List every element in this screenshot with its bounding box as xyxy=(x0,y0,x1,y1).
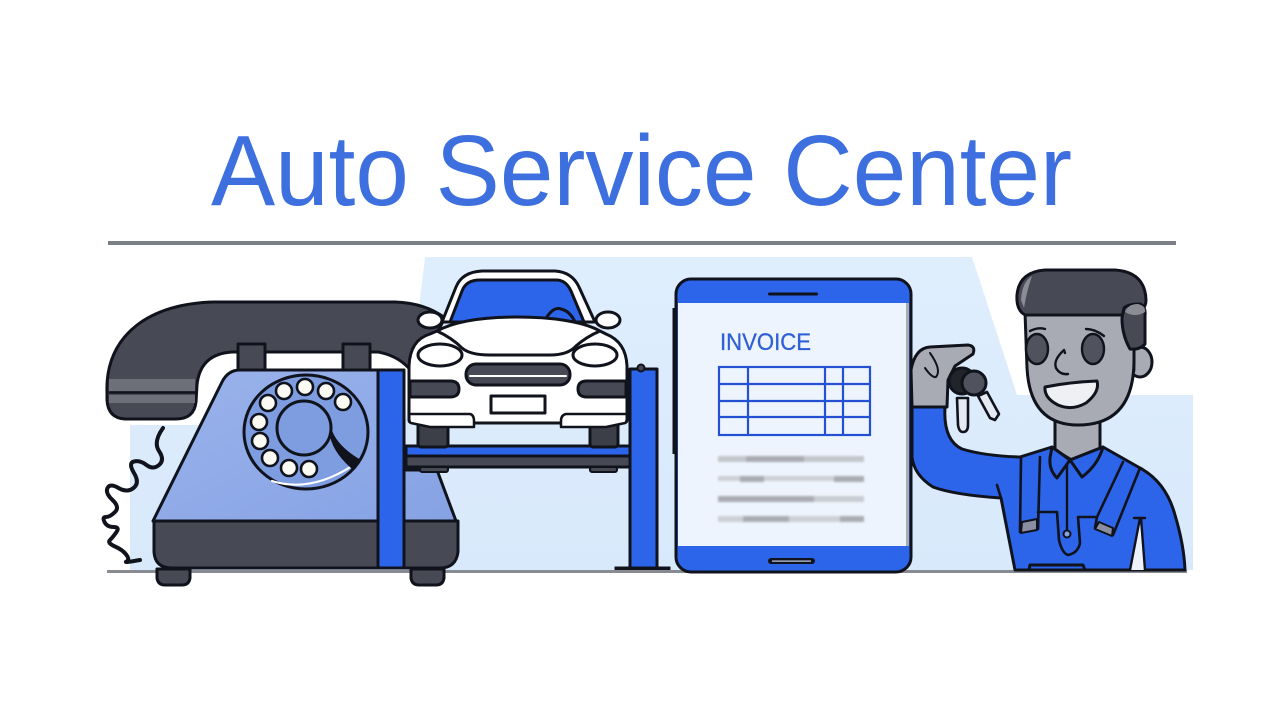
handset xyxy=(107,302,445,419)
handset stripes xyxy=(109,379,195,391)
rotary dial xyxy=(244,375,368,489)
sleeve fold xyxy=(1131,522,1145,570)
icon: car on lift xyxy=(406,271,670,570)
neck xyxy=(1055,420,1100,462)
lift beam xyxy=(406,446,630,456)
car roof xyxy=(442,271,595,322)
keys xyxy=(957,398,968,432)
phone feet xyxy=(157,569,190,585)
overall straps xyxy=(1020,457,1140,555)
tablet screen xyxy=(678,303,909,546)
icon: rotary telephone xyxy=(104,302,458,585)
windshield xyxy=(450,280,584,322)
blurred text lines xyxy=(718,456,864,522)
air intakes xyxy=(410,381,459,397)
phone body xyxy=(153,370,456,521)
torso and arm xyxy=(912,407,1185,570)
mouth xyxy=(1045,381,1098,408)
nose xyxy=(1055,350,1068,374)
invoice table xyxy=(719,367,870,435)
face xyxy=(1025,312,1134,425)
sleeve crease xyxy=(997,485,1001,498)
collar xyxy=(1050,447,1070,478)
grille xyxy=(466,364,570,385)
lift post xyxy=(630,369,657,568)
hand xyxy=(911,345,974,407)
ear xyxy=(1128,347,1152,377)
invoice heading: INVOICE xyxy=(720,329,811,356)
background shape xyxy=(130,257,1193,570)
tablet side button xyxy=(672,308,676,454)
phone cord xyxy=(104,428,163,562)
key fob xyxy=(949,368,975,394)
eyes xyxy=(1026,334,1048,364)
blue strap xyxy=(378,370,404,568)
bumpers xyxy=(411,414,474,427)
mirrors xyxy=(418,312,442,328)
icon: mechanic holding keys xyxy=(911,270,1185,570)
overall buckles xyxy=(1021,519,1037,533)
eyebrows xyxy=(1030,328,1104,336)
headlights xyxy=(418,344,462,366)
top divider xyxy=(108,241,1176,245)
title: Auto Service Center xyxy=(211,115,1072,227)
cradle tabs xyxy=(238,344,265,372)
cradle gap xyxy=(196,352,412,400)
hood xyxy=(437,331,600,355)
car body xyxy=(409,317,627,423)
license plate xyxy=(491,396,545,413)
tablet speaker xyxy=(768,292,818,296)
tablet home bar xyxy=(768,558,815,564)
tablet body xyxy=(676,279,911,572)
tyres xyxy=(418,422,448,447)
floor line xyxy=(107,570,1187,573)
hair xyxy=(1017,270,1146,315)
shirt placket xyxy=(1066,460,1068,532)
panel: invoice tablet xyxy=(672,279,911,572)
pocket xyxy=(1029,565,1085,570)
phone base xyxy=(154,521,458,568)
